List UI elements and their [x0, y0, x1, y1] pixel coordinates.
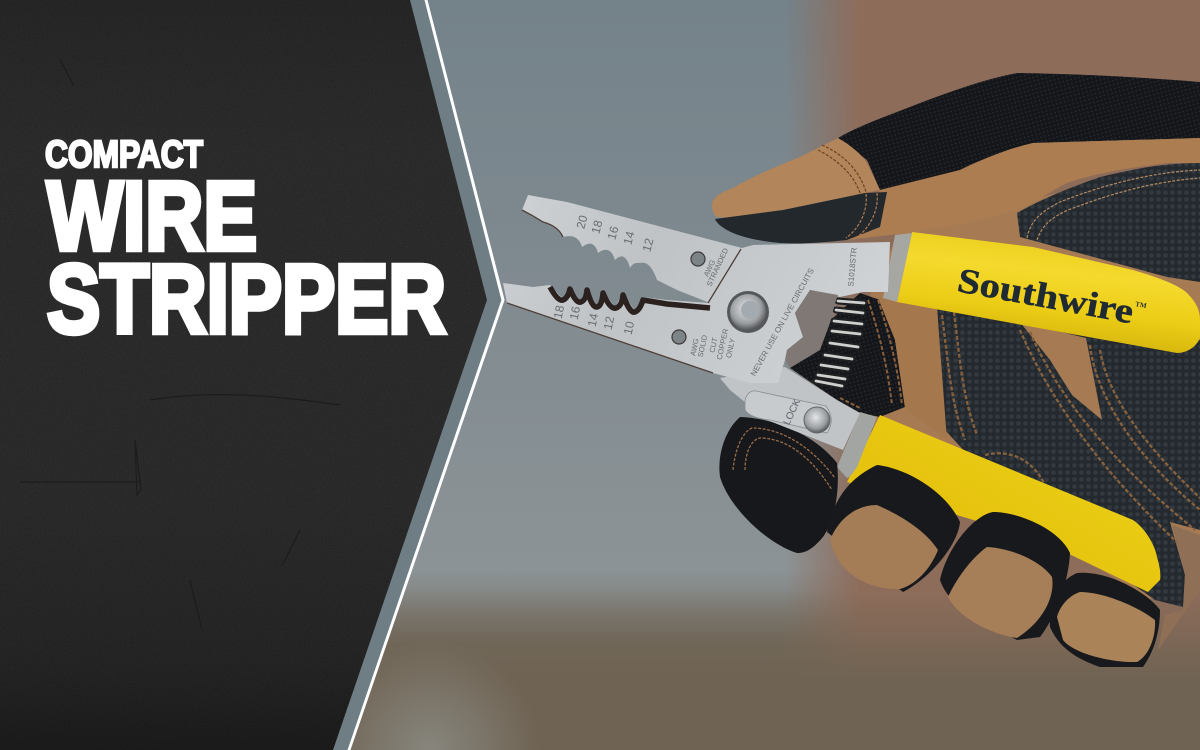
- lower gauge numbers: 12: [601, 315, 617, 331]
- panel: dark title panel: [0, 0, 490, 750]
- upper gauge numbers: 18: [589, 218, 606, 235]
- upper gauge numbers: 20: [574, 213, 591, 230]
- lower gauge numbers: 10: [621, 320, 637, 336]
- lower gauge numbers: COPPER: [715, 327, 730, 361]
- thumb stitching: [733, 428, 835, 490]
- glove: pad stitching: [846, 193, 877, 238]
- brand label: TM: [1135, 300, 1148, 310]
- lower gauge numbers: 14: [585, 312, 601, 328]
- lower gauge numbers: CUT: [707, 336, 720, 354]
- brand label: Southwire: [955, 261, 1137, 331]
- glove: palm stitching: [942, 312, 1200, 550]
- stripper steel body and jaws: [503, 195, 890, 383]
- lock label: LOCK: [782, 397, 803, 427]
- glove: mesh under spring: [790, 293, 905, 417]
- lower gauge numbers: ONLY: [724, 337, 737, 359]
- title: [45, 134, 446, 354]
- lower handle collar: [837, 412, 877, 478]
- black thumb: [719, 417, 838, 553]
- spring: [816, 301, 864, 386]
- gloved hand: [712, 73, 1200, 650]
- lower gauge numbers: [551, 247, 859, 378]
- upper yellow handle: [897, 232, 1200, 353]
- blade shadow lines: [507, 210, 741, 373]
- upper handle collar: [883, 233, 912, 302]
- grey chevron band: [333, 0, 503, 750]
- lower yellow handle: [847, 415, 1160, 592]
- lower gauge numbers: S1018STR: [846, 247, 859, 287]
- finger 1: [827, 465, 960, 592]
- upper gauge numbers: 12: [640, 236, 657, 253]
- title line: compact: COMPACT: [45, 134, 203, 176]
- lower gauge numbers: AWG: [688, 337, 701, 357]
- finger 3: [1050, 573, 1160, 667]
- glove: upper palm pad: [1017, 163, 1200, 282]
- lock plate: [745, 391, 831, 433]
- lock rivet: [804, 407, 830, 433]
- lower gauge numbers: 16: [567, 305, 583, 321]
- finger 2: [940, 512, 1070, 640]
- glove: fingertip stitching: [818, 145, 866, 193]
- upper gauge numbers: [574, 213, 730, 288]
- lower gauge numbers: 18: [551, 304, 567, 320]
- title line: wire: WIRE: [47, 162, 257, 270]
- upper gauge numbers: 14: [621, 229, 638, 246]
- glove: upper pad stitching: [1027, 170, 1200, 240]
- glove: mesh stitching: [840, 300, 902, 408]
- window opening: [785, 290, 838, 368]
- glove: tan palm strip: [878, 298, 947, 440]
- stripper holes: [672, 252, 705, 344]
- lower gauge numbers: NEVER USE ON LIVE CIRCUITS: [749, 267, 816, 378]
- lower steel arm: [720, 367, 860, 450]
- upper gauge numbers: 16: [605, 224, 622, 241]
- jaw dark edge: [550, 287, 710, 312]
- glove: tan strip: [1020, 322, 1102, 420]
- glove: tan back layer: [860, 160, 1200, 600]
- glove: tan finger side: [847, 138, 1200, 240]
- glove: skin at lower right: [1158, 525, 1200, 650]
- lower gauge numbers: SOLID: [696, 334, 709, 358]
- glove: black mesh index finger: [838, 73, 1200, 190]
- upper gauge numbers: STRANDED: [705, 246, 730, 288]
- pivot bolt: [727, 291, 769, 333]
- white chevron line: [348, 0, 505, 750]
- glove: centre palm pad: [937, 305, 1200, 607]
- glove: fingertip: [712, 138, 880, 218]
- title line: stripper: STRIPPER: [47, 244, 446, 354]
- upper gauge numbers: AWG: [702, 258, 717, 278]
- glove: fingertip black pad: [715, 192, 887, 243]
